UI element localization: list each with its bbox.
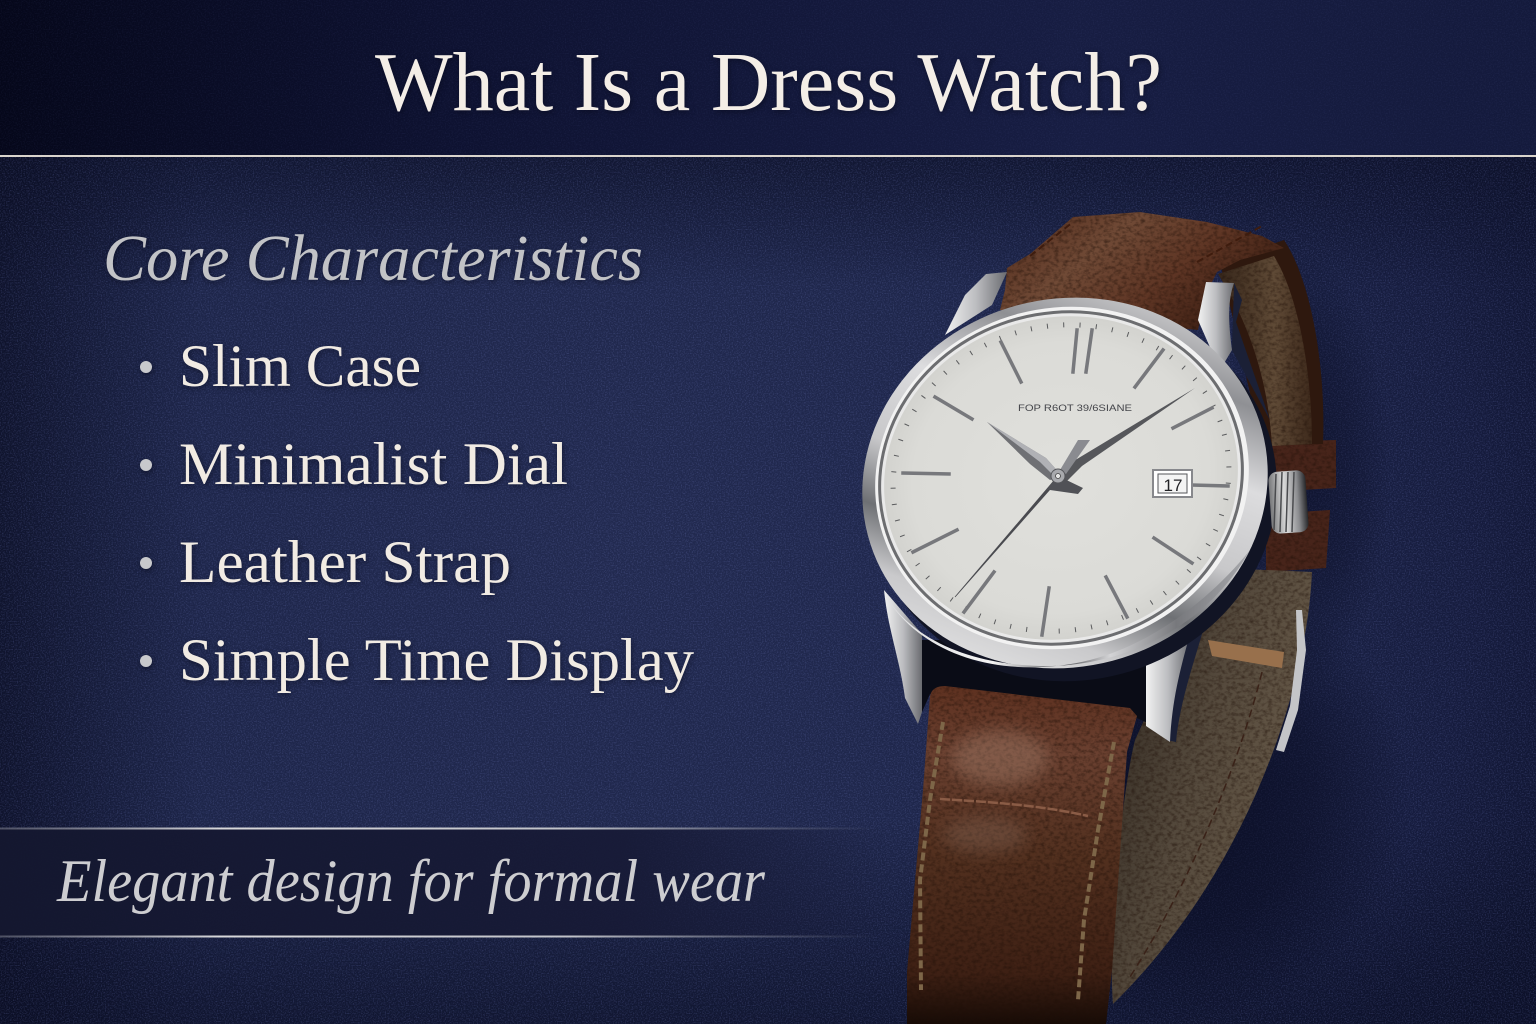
subheading: core characteristics: Core Characteristics — [103, 222, 643, 295]
watch shadow — [930, 250, 1410, 1024]
minute track — [858, 287, 1264, 669]
lugs — [884, 272, 1270, 742]
title: What Is a Dress Watch? — [375, 36, 1162, 129]
characteristics list — [140, 333, 694, 693]
crown — [1268, 470, 1309, 534]
upper strap front — [1000, 212, 1284, 330]
header bar — [0, 0, 1536, 157]
strap keepers — [1266, 440, 1336, 572]
list item: slim case: Slim Case — [179, 333, 421, 399]
date window: 17 — [1164, 476, 1182, 495]
bezel — [820, 252, 1310, 714]
date window — [1153, 470, 1192, 497]
tagline text: Elegant design for formal wear — [56, 848, 766, 914]
strap back lining: lower — [1112, 568, 1312, 1004]
strap back lining: upper — [1218, 256, 1312, 446]
tagline band — [0, 828, 890, 938]
illustration: dress watch — [820, 212, 1410, 1024]
list item: leather strap: Leather Strap — [179, 529, 511, 595]
lower strap front — [907, 686, 1137, 1024]
case side — [829, 262, 1319, 726]
strap back: upper outer rim — [1220, 240, 1323, 446]
list item: simple time display: Simple Time Display — [179, 627, 694, 693]
buckle — [1276, 610, 1306, 752]
under-case shadow — [920, 640, 1150, 724]
brand text: FOP R6OT 39/6SIANE — [1018, 403, 1132, 414]
list item: minimalist dial: Minimalist Dial — [179, 431, 568, 497]
hour markers — [903, 330, 1228, 635]
dial — [848, 277, 1274, 679]
hands — [955, 388, 1195, 597]
stitching — [920, 722, 943, 990]
